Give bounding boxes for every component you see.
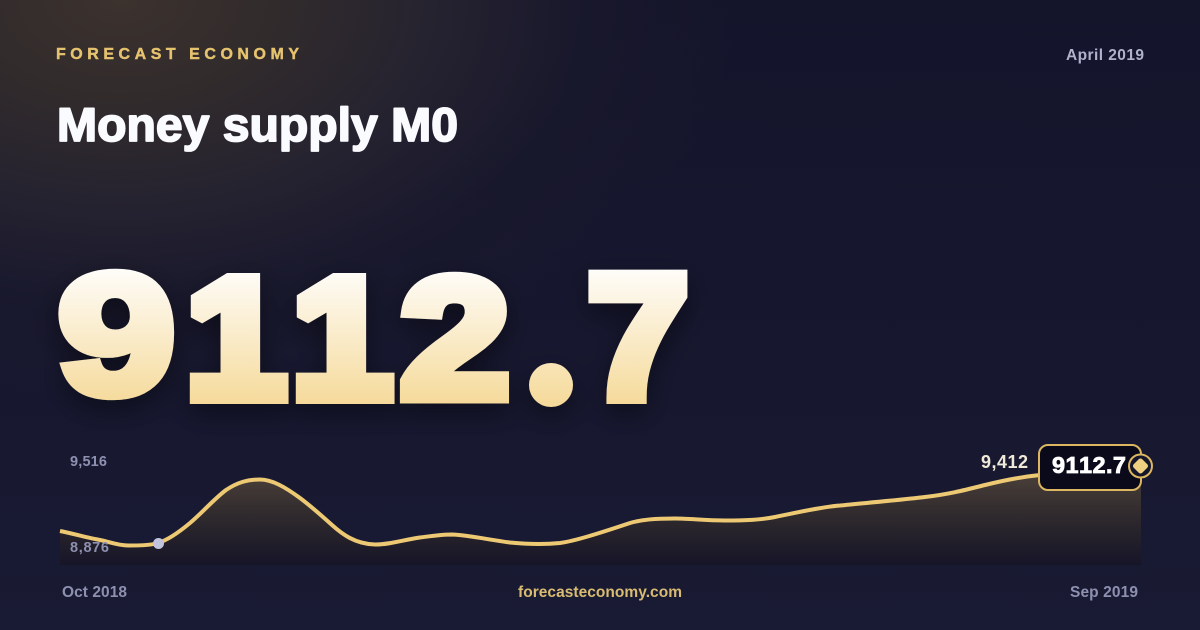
area chart xyxy=(60,465,1141,565)
current value marker xyxy=(1129,454,1152,478)
title: Money supply M0 xyxy=(57,98,458,151)
current value badge xyxy=(1039,445,1141,490)
main value: . xyxy=(533,274,569,420)
end date: Sep 2019 xyxy=(1070,584,1138,601)
start date: Oct 2018 xyxy=(62,584,127,601)
low point marker xyxy=(153,538,164,549)
website: forecasteconomy.com xyxy=(518,584,682,601)
main value: 9 xyxy=(58,239,175,429)
current value badge: 9112.7 xyxy=(1052,452,1126,478)
chart line xyxy=(60,475,1040,546)
main value: 7 xyxy=(588,238,688,434)
axis min label: 8,876 xyxy=(70,540,109,556)
brand label: FORECAST ECONOMY xyxy=(56,46,299,63)
main value xyxy=(58,238,688,434)
main value: 2 xyxy=(401,243,509,433)
main value: 1 xyxy=(292,244,392,434)
peak value label: 9,412 xyxy=(981,452,1028,472)
main value: 1 xyxy=(186,244,286,434)
chart area fill xyxy=(60,465,1141,565)
date: April 2019 xyxy=(1066,47,1144,64)
axis max label: 9,516 xyxy=(70,454,107,470)
